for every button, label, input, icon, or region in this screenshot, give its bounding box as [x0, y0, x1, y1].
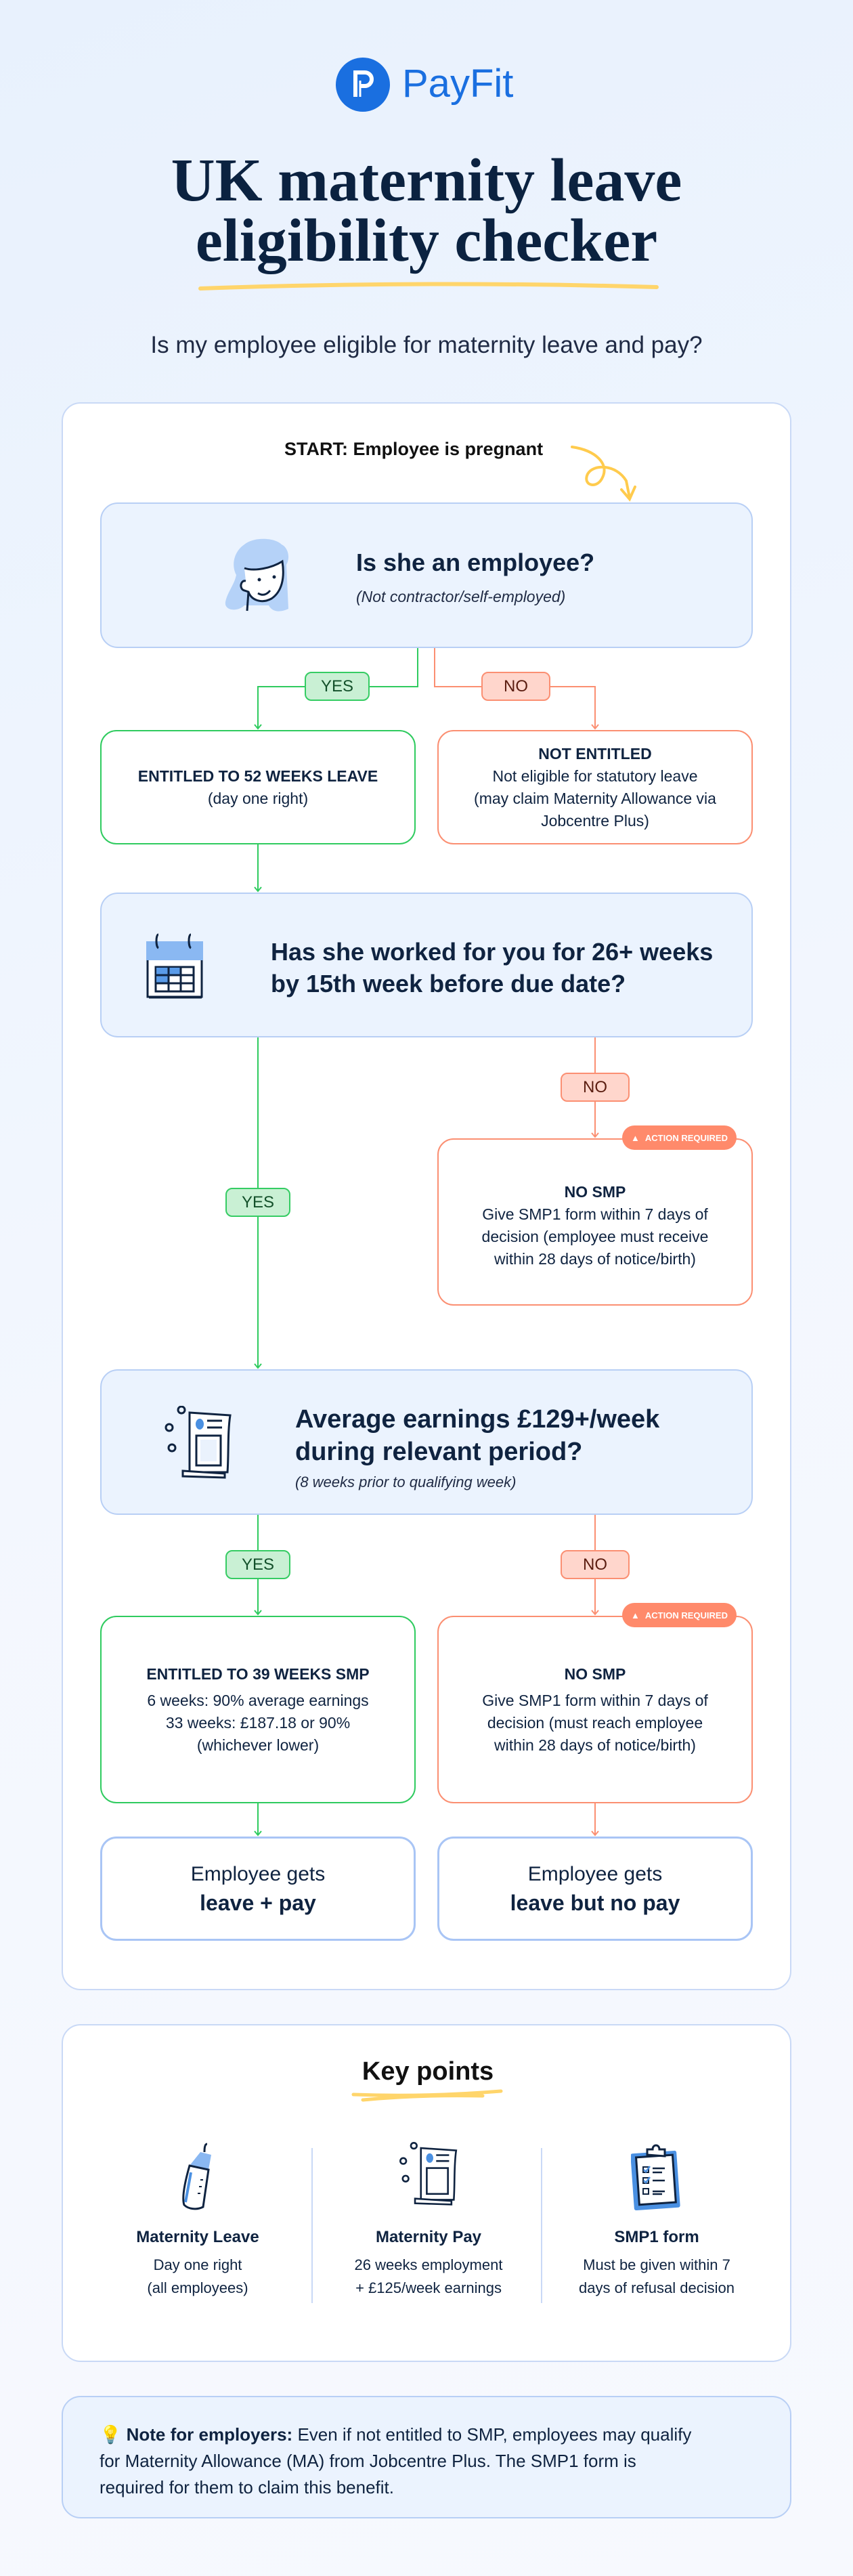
pill: yes 3 [225, 1550, 290, 1579]
key point: smp1 form: SMP1 form [614, 2228, 699, 2246]
icon: squiggle arrow [571, 446, 636, 502]
arrow: q2 yes [255, 1037, 261, 1368]
question text: Is she an employee? [356, 549, 594, 576]
arrow: smp to outcome [255, 1803, 261, 1835]
note panel: for Maternity Allowance (MA) from Jobcentre Plus. The SMP1 form is [100, 2451, 636, 2471]
question 1: (Not contractor/self-employed) [356, 588, 565, 605]
box: entitled 52 weeks: (day one right) [208, 790, 308, 807]
pill: no 3: NO [583, 1555, 607, 1574]
pill: yes 2 [225, 1188, 290, 1217]
arrow: q3 yes [255, 1515, 261, 1614]
note panel: required for them to claim this benefit. [100, 2477, 394, 2497]
outcome: leave but no pay: Employee gets [528, 1863, 662, 1885]
key point: smp1 form [579, 2144, 735, 2296]
box: no smp 2: within 28 days of notice/birth) [494, 1736, 696, 1754]
question text [271, 938, 713, 997]
box: entitled 52 weeks: ENTITLED TO 52 WEEKS LEAVE [138, 767, 378, 784]
question 3: (8 weeks prior to qualifying week) [295, 1474, 516, 1490]
box: not entitled: NOT ENTITLED [538, 745, 652, 763]
title [171, 147, 682, 274]
question text [295, 1405, 659, 1466]
icon: receipt [165, 1406, 232, 1479]
outcome: leave + pay: Employee gets [191, 1863, 325, 1885]
box: not entitled [437, 730, 753, 844]
key point: maternity pay: + £125/week earnings [355, 2279, 502, 2296]
connectors [254, 648, 599, 1837]
pill: no 1: NO [504, 677, 528, 695]
icon: face [225, 539, 288, 611]
key point: maternity leave [136, 2143, 259, 2296]
box: entitled 39 weeks smp: 6 weeks: 90% average earnings [147, 1692, 369, 1709]
key point: maternity pay: 26 weeks employment [355, 2256, 502, 2273]
box: entitled 39 weeks smp [100, 1616, 416, 1803]
subtitle: Is my employee eligible for maternity leave and pay? [150, 332, 703, 358]
box: entitled 39 weeks smp: 33 weeks: £187.18 or 90% [166, 1713, 350, 1731]
outcome: leave but no pay [437, 1837, 753, 1941]
box: no smp 2 [437, 1616, 753, 1803]
icon: bottle [182, 2143, 211, 2210]
pill: yes 1 [305, 672, 370, 701]
logo: PayFit [402, 62, 513, 106]
arrow: q1 no [435, 648, 598, 729]
badge: action required 1: ACTION REQUIRED [645, 1132, 728, 1143]
box: no smp 2: Give SMP1 form within 7 days of [482, 1692, 708, 1709]
key point: smp1 form: Must be given within 7 [583, 2256, 730, 2273]
question 2 [100, 893, 753, 1037]
box: entitled 39 weeks smp: ENTITLED TO 39 WEEKS SMP [146, 1665, 370, 1682]
divider [311, 2148, 313, 2303]
box: no smp 1: within 28 days of notice/birth) [494, 1250, 696, 1268]
badge: action required 2 [622, 1603, 737, 1627]
box: not entitled: Not eligible for statutory leave [493, 767, 697, 784]
box: not entitled: Jobcentre Plus) [541, 811, 649, 829]
box: no smp 2: NO SMP [565, 1665, 626, 1682]
icon: receipt [399, 2142, 458, 2206]
start label: START: Employee is pregnant [284, 439, 543, 459]
badge: action required 2: ACTION REQUIRED [645, 1610, 728, 1620]
pill: no 2: NO [583, 1078, 607, 1096]
note panel [62, 2396, 791, 2518]
box: no smp 1: NO SMP [565, 1182, 626, 1200]
box: no smp 1: decision (employee must receive [482, 1227, 708, 1245]
box: no smp 1: Give SMP1 form within 7 days of [482, 1205, 708, 1223]
arrow: q1 yes [255, 648, 418, 729]
box: no smp 1 [437, 1138, 753, 1306]
key point: maternity leave: Maternity Leave [136, 2228, 259, 2246]
pill: yes 1: YES [321, 677, 353, 695]
key point: maternity pay [355, 2142, 502, 2296]
outcome: leave but no pay: leave but no pay [510, 1891, 680, 1915]
question text: during relevant period? [295, 1438, 582, 1466]
key point: maternity leave: Day one right [154, 2256, 242, 2273]
badge: action required 1 [622, 1125, 737, 1150]
badge: action required 1: ▲ [631, 1132, 640, 1143]
outcome: leave + pay [100, 1837, 416, 1941]
icon: clipboard [631, 2144, 680, 2210]
title underline [198, 282, 659, 291]
pill: yes 2: YES [242, 1193, 274, 1211]
panel: flowchart [62, 402, 791, 1990]
box: entitled 39 weeks smp: (whichever lower) [197, 1736, 319, 1754]
pill: yes 3: YES [242, 1555, 274, 1574]
question text: by 15th week before due date? [271, 970, 626, 997]
heading underline [352, 2090, 502, 2102]
title: eligibility checker [196, 207, 657, 274]
arrow: q3 no [592, 1515, 598, 1614]
key point: maternity leave: (all employees) [147, 2279, 248, 2296]
outcome: leave + pay: leave + pay [200, 1891, 316, 1915]
logo [336, 58, 513, 112]
pill: no 1 [481, 672, 550, 701]
key point: smp1 form: days of refusal decision [579, 2279, 735, 2296]
question text: Has she worked for you for 26+ weeks [271, 938, 713, 966]
pill: no 2 [561, 1073, 630, 1102]
icon: calendar [146, 933, 203, 998]
title: UK maternity leave [171, 147, 682, 214]
badge: action required 2: ▲ [631, 1610, 640, 1620]
arrow: leave to q2 [255, 844, 261, 891]
pill: no 3 [561, 1550, 630, 1579]
box: no smp 2: decision (must reach employee [487, 1713, 703, 1731]
arrow: no smp to outcome [592, 1803, 598, 1835]
key point: maternity pay: Maternity Pay [376, 2228, 481, 2246]
question 3 [100, 1369, 753, 1515]
question text: Average earnings £129+/week [295, 1405, 659, 1434]
key points heading: Key points [362, 2057, 494, 2086]
question 1 [100, 502, 753, 648]
box: not entitled: (may claim Maternity Allowance via [474, 790, 716, 807]
note panel: 💡 Note for employers: Even if not entitled to SMP, employees may qualify [100, 2424, 691, 2445]
box: entitled 52 weeks [100, 730, 416, 844]
arrow: q2 no [592, 1037, 598, 1137]
panel: key points [62, 2024, 791, 2362]
